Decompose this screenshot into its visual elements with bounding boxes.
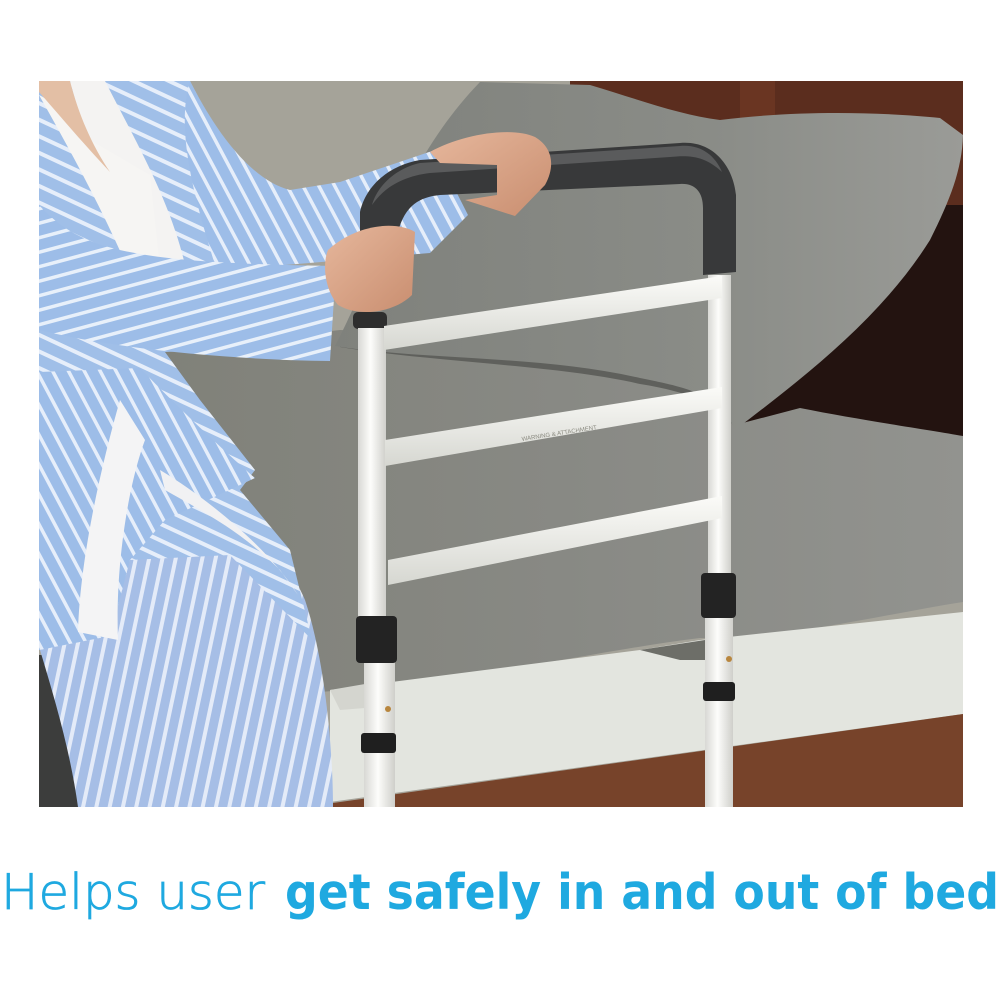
right post bbox=[708, 275, 731, 585]
caption light part: Helps user bbox=[1, 864, 266, 921]
pajama legs bbox=[40, 470, 333, 807]
right adjuster knob bbox=[701, 573, 736, 618]
wooden headboard bbox=[570, 81, 963, 440]
wall bbox=[39, 81, 963, 807]
rail lower grip bbox=[353, 312, 387, 329]
upper arm sleeve bbox=[185, 81, 468, 265]
top rail padded handle bbox=[360, 143, 736, 275]
right post lower bbox=[705, 610, 733, 807]
dark seat edge bbox=[39, 655, 81, 807]
white robe lining bbox=[70, 81, 185, 268]
mattress bbox=[160, 330, 963, 692]
hand on top rail bbox=[430, 132, 551, 216]
hand on side grip bbox=[325, 226, 415, 312]
shadow below mattress bbox=[640, 640, 705, 660]
left post bbox=[358, 328, 386, 658]
photo: woman using bed rail bbox=[39, 81, 963, 807]
warning label: WARNING & ATTACHMENT bbox=[521, 425, 598, 443]
left post lower bbox=[364, 640, 395, 807]
skin at neck bbox=[39, 81, 110, 172]
left collar bbox=[361, 733, 396, 753]
robe skirt and belt bbox=[39, 368, 255, 650]
crossbar middle bbox=[385, 387, 722, 466]
brass pins bbox=[385, 656, 732, 712]
pillow shadow bbox=[340, 335, 735, 428]
crossbar top bbox=[384, 276, 722, 350]
robe torso bbox=[39, 81, 330, 650]
frame rail bbox=[330, 684, 365, 710]
crossbar bottom bbox=[388, 496, 722, 585]
pillow bbox=[335, 82, 963, 430]
right collar bbox=[703, 682, 735, 701]
left adjuster knob bbox=[356, 616, 397, 663]
bed frame wood bbox=[333, 714, 963, 807]
handle highlight bbox=[372, 146, 722, 205]
caption bbox=[1, 864, 999, 921]
lower arm sleeve bbox=[39, 205, 336, 361]
box spring bbox=[330, 612, 963, 802]
